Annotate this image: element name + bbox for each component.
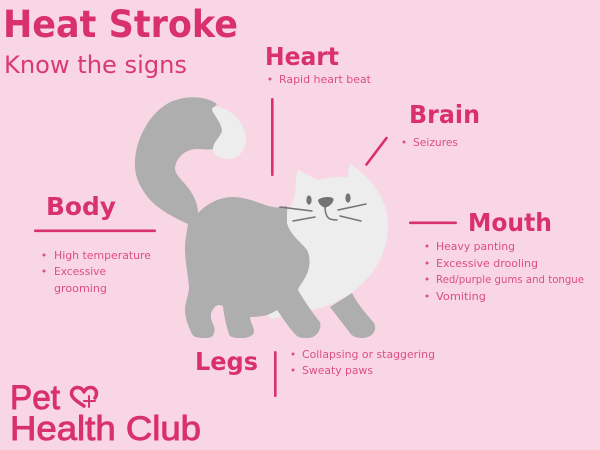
mouth section: Heavy panting [436,241,515,253]
illustration: cat [135,97,388,338]
body section: High temperature [54,250,151,262]
brain section: Seizures [413,137,458,149]
mouth section [409,208,584,303]
mouth section: Mouth [468,208,552,237]
brain section: Brain [409,100,480,129]
legs section: Collapsing or staggering [302,349,435,361]
body section: Body [46,192,116,221]
icon: heart with plus [72,388,96,407]
legs section [195,347,435,397]
subtitle: Know the signs [4,51,187,79]
brain section [366,100,480,164]
mouth section: Excessive drooling [436,258,538,270]
heart section [265,42,371,176]
logo: Pet Health Club [10,379,201,448]
logo: Pet Health Club: Pet [10,379,61,417]
body section: grooming [54,283,107,295]
body section: Excessive [54,266,106,278]
title: Heat Stroke [3,3,238,46]
legs section: Legs [195,347,258,376]
heart section: Rapid heart beat [279,74,371,86]
mouth section: Red/purple gums and tongue [436,274,584,286]
logo: Pet Health Club: Health Club [10,410,201,448]
heart section: Heart [265,42,339,71]
mouth section: Vomiting [436,291,486,303]
legs section: Sweaty paws [302,365,373,377]
body section [34,192,156,295]
